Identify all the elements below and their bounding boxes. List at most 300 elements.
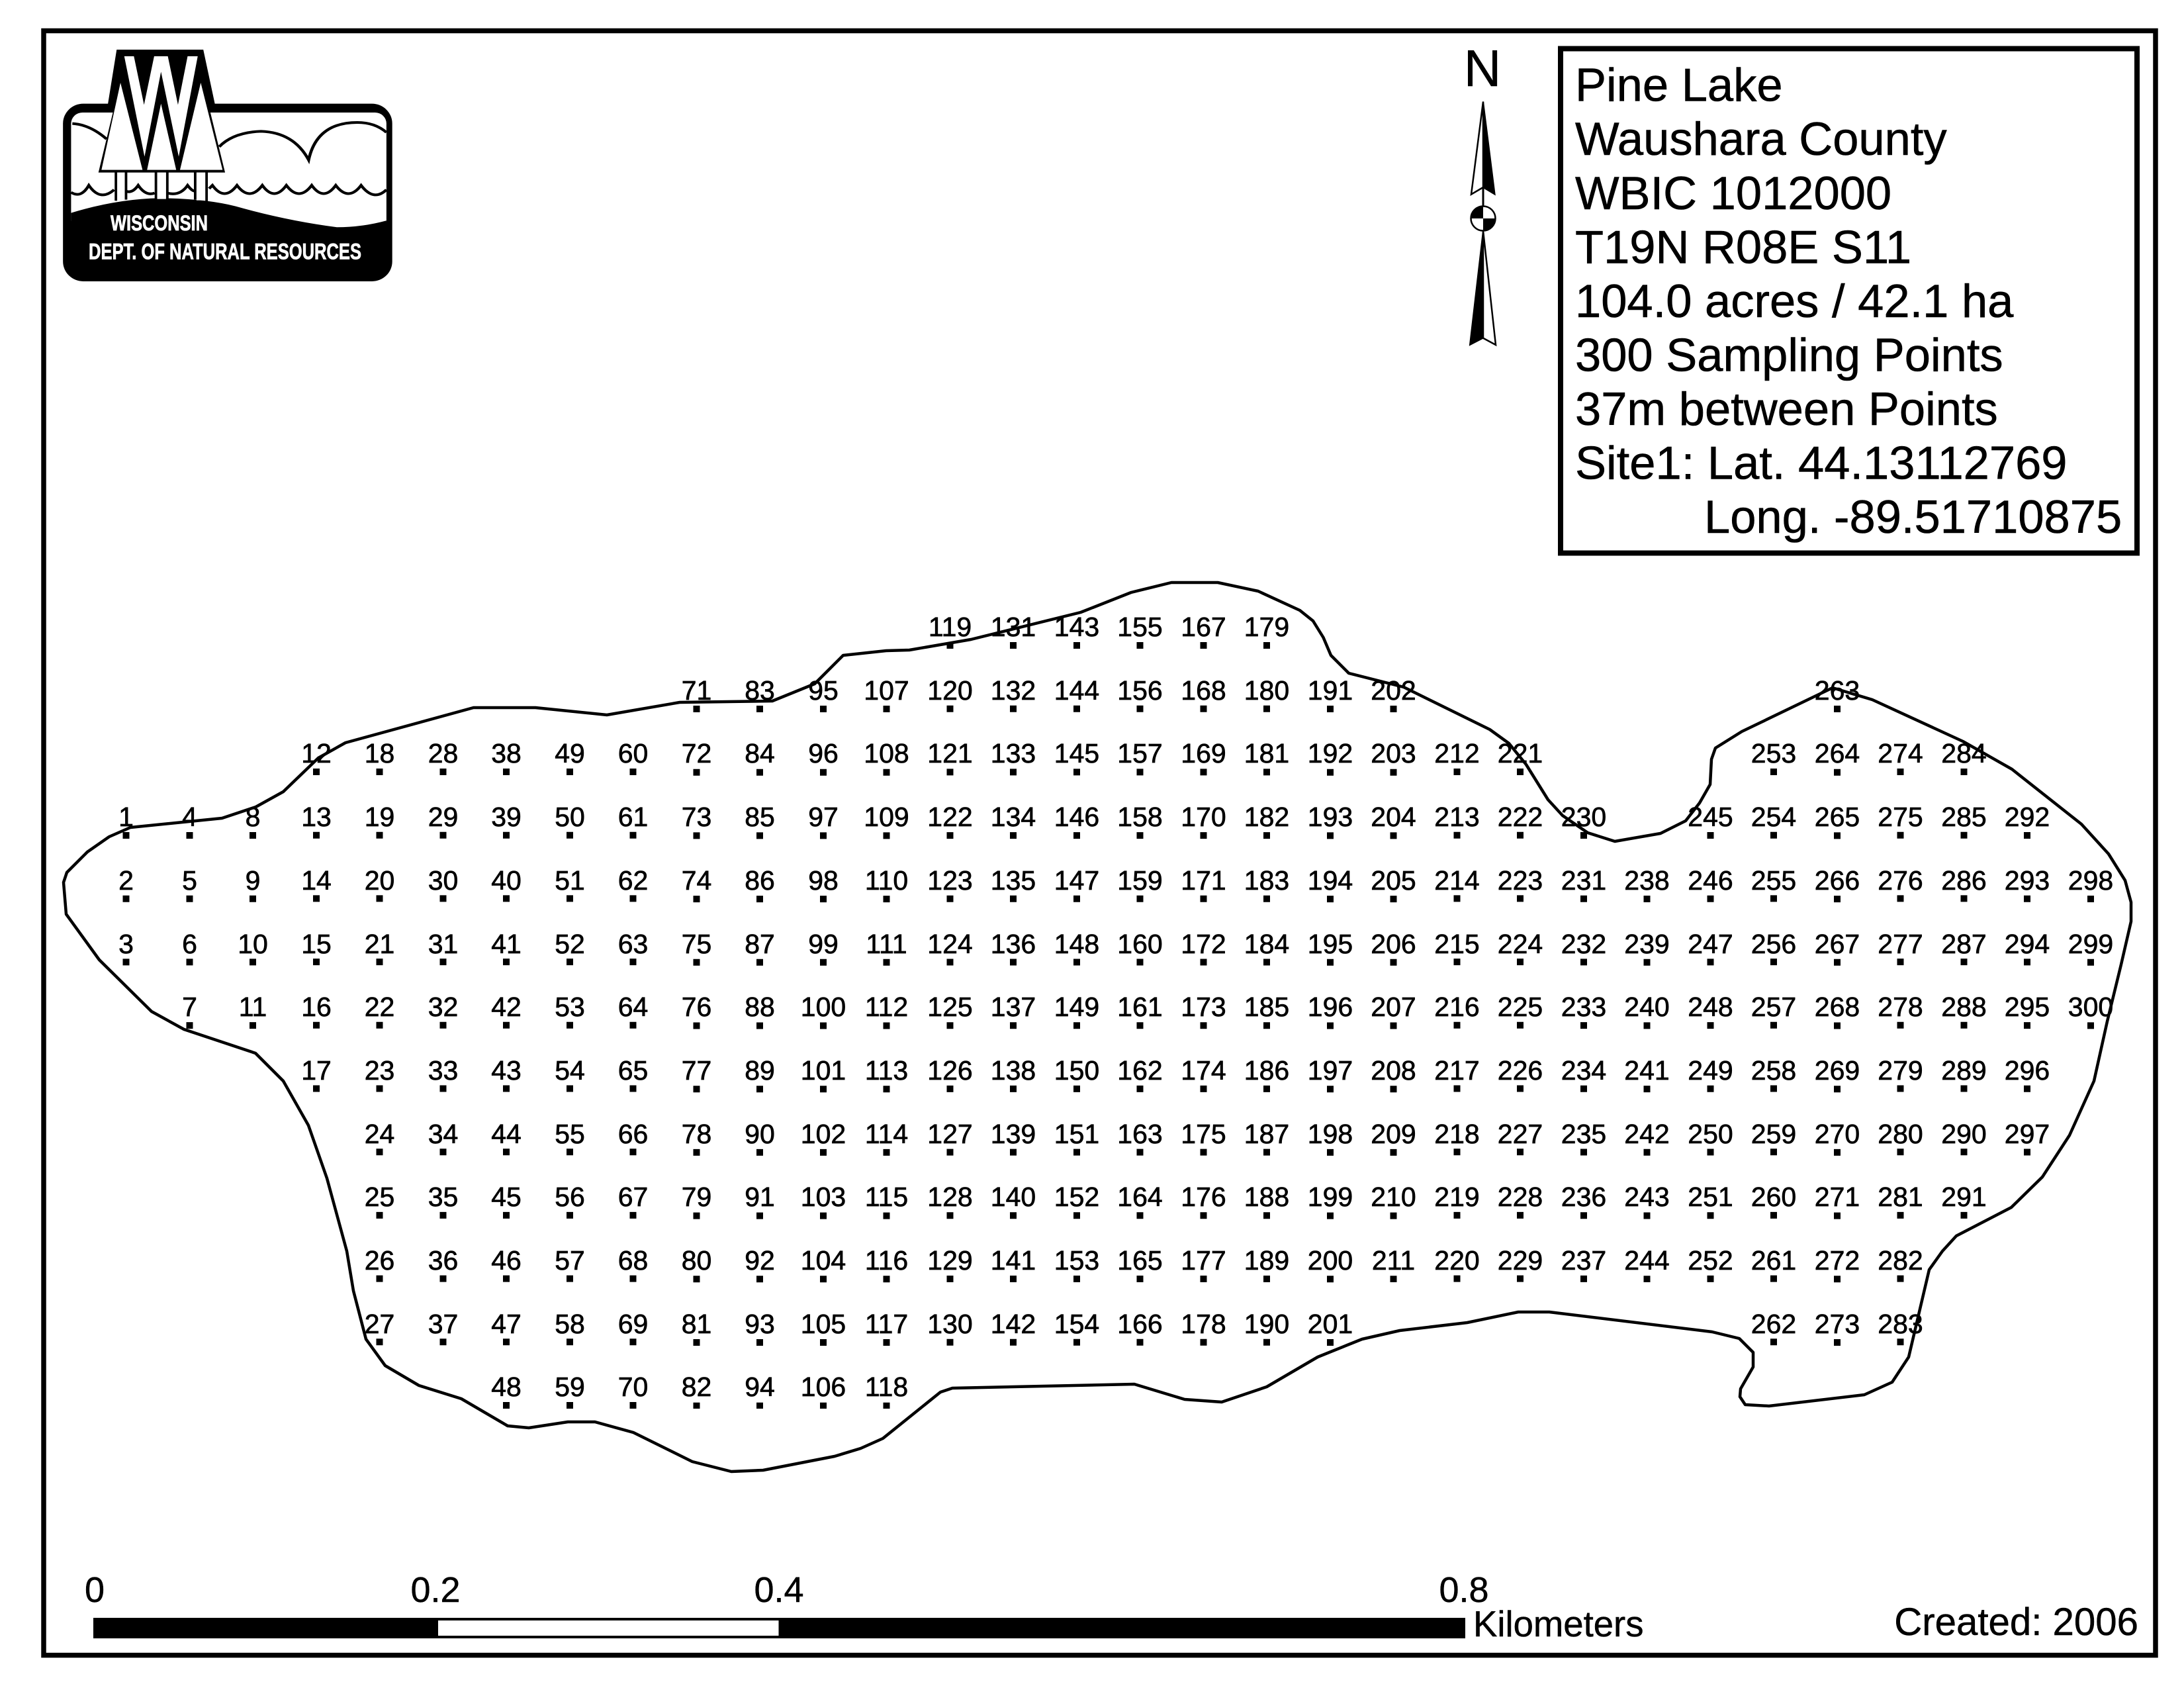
sampling points column 7: 42 — [491, 992, 522, 1022]
sampling points column 18: 170 — [1181, 802, 1226, 832]
sampling points column 12: 103 — [801, 1182, 846, 1212]
sampling points column 7: 38 — [491, 738, 522, 769]
sampling points column 27: 262 — [1751, 1309, 1796, 1339]
sampling points column 14: 128 — [927, 1182, 973, 1212]
sampling points column 22: 219 — [1434, 1182, 1480, 1212]
sampling points column 17: 166 — [1117, 1309, 1163, 1339]
sampling points column 8: 49 — [555, 738, 585, 769]
sampling points column 17: 156 — [1117, 675, 1163, 706]
scale bar: 0.2 — [410, 1570, 461, 1610]
sampling points column 18: 171 — [1181, 865, 1226, 896]
sampling points column 18: 173 — [1181, 992, 1226, 1022]
sampling points column 3: 9 — [246, 865, 260, 896]
sampling points column 1 — [118, 802, 134, 966]
sampling points column 2: 6 — [182, 929, 197, 959]
sampling points column 17: 157 — [1117, 738, 1163, 769]
sampling points column 17: 163 — [1117, 1119, 1163, 1149]
sampling points column 2: 5 — [182, 865, 197, 896]
legend box: Long. -89.51710875 — [1704, 491, 2122, 543]
sampling points column 12: 102 — [801, 1119, 846, 1149]
sampling points column 31: 296 — [2005, 1055, 2050, 1086]
sampling points column 13: 109 — [864, 802, 909, 832]
sampling points column 20: 201 — [1308, 1309, 1353, 1339]
sampling points column 9: 69 — [618, 1309, 648, 1339]
sampling points column 20: 198 — [1308, 1119, 1353, 1149]
sampling points column 3: 8 — [246, 802, 260, 832]
sampling points column 18: 177 — [1181, 1245, 1226, 1276]
sampling points column 21 — [1371, 675, 1416, 1282]
sampling points column 30: 290 — [1941, 1119, 1987, 1149]
sampling points column 28 — [1815, 675, 1860, 1346]
sampling points column 20: 193 — [1308, 802, 1353, 832]
legend box — [1561, 49, 2137, 553]
sampling points column 23: 226 — [1498, 1055, 1543, 1086]
sampling points column 6: 31 — [428, 929, 458, 959]
sampling points column 14: 125 — [927, 992, 973, 1022]
sampling points column 11: 88 — [745, 992, 775, 1022]
sampling points column 24: 231 — [1561, 865, 1606, 896]
sampling points column 5: 20 — [365, 865, 394, 896]
sampling points column 16: 143 — [1054, 612, 1099, 642]
sampling points column 23: 227 — [1498, 1119, 1543, 1149]
sampling points column 11: 87 — [745, 929, 775, 959]
sampling points column 2: 7 — [182, 992, 197, 1022]
sampling points column 23: 224 — [1498, 929, 1543, 959]
sampling points column 6: 34 — [428, 1119, 458, 1149]
sampling points column 32 — [2068, 865, 2113, 1029]
sampling points column 6 — [428, 738, 458, 1346]
legend box: T19N R08E S11 — [1575, 221, 1911, 273]
sampling points column 5: 21 — [365, 929, 394, 959]
sampling points column 22: 213 — [1434, 802, 1480, 832]
sampling points column 5 — [365, 738, 394, 1346]
sampling points column 19 — [1244, 612, 1289, 1346]
sampling points column 12: 98 — [808, 865, 839, 896]
sampling points column 13: 111 — [866, 929, 907, 959]
sampling points column 17: 164 — [1117, 1182, 1163, 1212]
sampling points column 23: 221 — [1498, 738, 1543, 769]
sampling points column 29: 274 — [1878, 738, 1923, 769]
sampling points column 26 — [1688, 802, 1733, 1282]
sampling points column 23: 228 — [1498, 1182, 1543, 1212]
scale bar: 0 — [85, 1570, 105, 1610]
sampling points column 13 — [864, 675, 909, 1409]
sampling points column 27: 260 — [1751, 1182, 1796, 1212]
sampling points column 4: 15 — [301, 929, 332, 959]
sampling points column 23 — [1498, 738, 1543, 1282]
sampling points column 15: 135 — [991, 865, 1036, 896]
sampling points column 18: 172 — [1181, 929, 1226, 959]
sampling points column 4: 14 — [301, 865, 332, 896]
sampling points column 17 — [1117, 612, 1163, 1346]
sampling points column 16: 154 — [1054, 1309, 1099, 1339]
sampling points column 8: 53 — [555, 992, 585, 1022]
sampling points column 20: 196 — [1308, 992, 1353, 1022]
sampling points column 29: 280 — [1878, 1119, 1923, 1149]
logo: Wisconsin DNR: WISCONSIN — [111, 211, 208, 235]
sampling points column 15: 136 — [991, 929, 1036, 959]
sampling points column 6: 37 — [428, 1309, 458, 1339]
sampling points column 30: 286 — [1941, 865, 1987, 896]
sampling points column 14: 124 — [927, 929, 973, 959]
sampling points column 27 — [1751, 738, 1796, 1346]
sampling points column 15: 141 — [991, 1245, 1036, 1276]
sampling points column 17: 165 — [1117, 1245, 1163, 1276]
sampling points column 14: 123 — [927, 865, 973, 896]
sampling points column 1: 3 — [118, 929, 134, 959]
sampling points column 13: 112 — [865, 992, 908, 1022]
sampling points column 10: 74 — [682, 865, 711, 896]
sampling points column 12: 97 — [808, 802, 839, 832]
sampling points column 25: 240 — [1624, 992, 1670, 1022]
sampling points column 30: 289 — [1941, 1055, 1987, 1086]
sampling points column 14: 130 — [927, 1309, 973, 1339]
sampling points column 13: 115 — [865, 1182, 908, 1212]
sampling points column 31: 295 — [2005, 992, 2050, 1022]
sampling points column 21: 203 — [1371, 738, 1416, 769]
sampling points column 7: 47 — [491, 1309, 522, 1339]
sampling points column 22: 214 — [1434, 865, 1480, 896]
logo: Wisconsin DNR: DEPT. OF NATURAL RESOURCES — [89, 240, 361, 265]
sampling points column 13: 117 — [865, 1309, 908, 1339]
sampling points column 9 — [618, 738, 648, 1409]
sampling points column 15: 134 — [991, 802, 1036, 832]
sampling points column 25: 244 — [1624, 1245, 1670, 1276]
sampling points column 12: 105 — [801, 1309, 846, 1339]
sampling points column 16: 151 — [1054, 1119, 1099, 1149]
scale bar — [85, 1570, 1643, 1644]
sampling points column 9: 68 — [618, 1245, 648, 1276]
sampling points column 12: 106 — [801, 1372, 846, 1402]
sampling points column 10: 79 — [682, 1182, 711, 1212]
sampling points column 14: 120 — [927, 675, 973, 706]
sampling points column 24: 233 — [1561, 992, 1606, 1022]
sampling points column 17: 162 — [1117, 1055, 1163, 1086]
sampling points column 17: 160 — [1117, 929, 1163, 959]
sampling points column 19: 188 — [1244, 1182, 1289, 1212]
sampling points column 14 — [927, 612, 973, 1346]
legend box: 300 Sampling Points — [1575, 328, 2003, 381]
sampling points column 26: 249 — [1688, 1055, 1733, 1086]
sampling points column 20: 199 — [1308, 1182, 1353, 1212]
sampling points column 2: 4 — [182, 802, 197, 832]
sampling points column 12: 100 — [801, 992, 846, 1022]
sampling points column 20 — [1308, 675, 1353, 1346]
sampling points column 9: 61 — [618, 802, 648, 832]
sampling points column 7 — [491, 738, 522, 1409]
sampling points column 15: 142 — [991, 1309, 1036, 1339]
sampling points column 6: 29 — [428, 802, 458, 832]
sampling points column 5: 23 — [365, 1055, 394, 1086]
sampling points column 30 — [1941, 738, 1987, 1219]
sampling points column 11: 89 — [745, 1055, 775, 1086]
sampling points column 7: 48 — [491, 1372, 522, 1402]
sampling points column 18: 174 — [1181, 1055, 1226, 1086]
sampling points column 7: 39 — [491, 802, 522, 832]
sampling points column 22: 220 — [1434, 1245, 1480, 1276]
sampling points column 27: 261 — [1751, 1245, 1796, 1276]
sampling points column 13: 113 — [865, 1055, 908, 1086]
sampling points column 3: 11 — [239, 992, 267, 1022]
sampling points column 27: 253 — [1751, 738, 1796, 769]
sampling points column 30: 291 — [1941, 1182, 1987, 1212]
sampling points column 20: 197 — [1308, 1055, 1353, 1086]
sampling points column 6: 36 — [428, 1245, 458, 1276]
sampling points column 31 — [2005, 802, 2050, 1156]
sampling points column 13: 107 — [864, 675, 909, 706]
sampling points column 17: 155 — [1117, 612, 1163, 642]
sampling points column 26: 250 — [1688, 1119, 1733, 1149]
sampling points column 18 — [1181, 612, 1226, 1346]
sampling points column 29: 279 — [1878, 1055, 1923, 1086]
sampling points column 29: 281 — [1878, 1182, 1923, 1212]
sampling points column 14: 122 — [927, 802, 973, 832]
legend box: WBIC 1012000 — [1575, 167, 1891, 219]
sampling points column 9: 70 — [618, 1372, 648, 1402]
sampling points column 14: 119 — [929, 612, 972, 642]
sampling points column 14: 127 — [927, 1119, 973, 1149]
sampling points column 16: 146 — [1054, 802, 1099, 832]
north arrow — [1464, 39, 1501, 345]
sampling points column 28: 273 — [1815, 1309, 1860, 1339]
sampling points column 30: 285 — [1941, 802, 1987, 832]
sampling points column 23: 223 — [1498, 865, 1543, 896]
sampling points column 10: 76 — [682, 992, 711, 1022]
sampling points column 26: 246 — [1688, 865, 1733, 896]
sampling points column 13: 110 — [865, 865, 908, 896]
sampling points column 18: 168 — [1181, 675, 1226, 706]
sampling points column 10: 73 — [682, 802, 711, 832]
sampling points column 16: 144 — [1054, 675, 1099, 706]
scale bar: 0.4 — [754, 1570, 804, 1610]
sampling points column 20: 195 — [1308, 929, 1353, 959]
sampling points column 19: 190 — [1244, 1309, 1289, 1339]
sampling points column 1: 1 — [118, 802, 134, 832]
sampling points column 21: 207 — [1371, 992, 1416, 1022]
sampling points column 20: 200 — [1308, 1245, 1353, 1276]
sampling points column 19: 186 — [1244, 1055, 1289, 1086]
sampling points column 30: 284 — [1941, 738, 1987, 769]
sampling points column 12: 96 — [808, 738, 839, 769]
sampling points column 6: 30 — [428, 865, 458, 896]
sampling points column 21: 205 — [1371, 865, 1416, 896]
sampling points column 12: 104 — [801, 1245, 846, 1276]
sampling points column 11: 94 — [745, 1372, 775, 1402]
legend box: Site1: Lat. 44.13112769 — [1575, 437, 2068, 489]
sampling points column 28: 269 — [1815, 1055, 1860, 1086]
sampling points column 4: 17 — [301, 1055, 332, 1086]
sampling points column 28: 263 — [1815, 675, 1860, 706]
sampling points column 24 — [1561, 802, 1606, 1282]
sampling points column 27: 259 — [1751, 1119, 1796, 1149]
sampling points column 21: 209 — [1371, 1119, 1416, 1149]
scale bar: 0.8 — [1439, 1570, 1489, 1610]
legend box: Pine Lake — [1575, 58, 1783, 111]
sampling points column 25: 243 — [1624, 1182, 1670, 1212]
sampling points column 19: 184 — [1244, 929, 1289, 959]
sampling points column 7: 44 — [491, 1119, 522, 1149]
lake outline — [64, 583, 2131, 1472]
sampling points column 16: 153 — [1054, 1245, 1099, 1276]
sampling points column 8: 54 — [555, 1055, 585, 1086]
sampling points column 15: 133 — [991, 738, 1036, 769]
sampling points column 16: 147 — [1054, 865, 1099, 896]
sampling points column 7: 41 — [491, 929, 522, 959]
sampling points column 1: 2 — [118, 865, 134, 896]
sampling points column 10: 80 — [682, 1245, 711, 1276]
sampling points column 6: 35 — [428, 1182, 458, 1212]
sampling points column 18: 175 — [1181, 1119, 1226, 1149]
sampling points column 29 — [1878, 738, 1923, 1346]
sampling points column 10: 75 — [682, 929, 711, 959]
sampling points column 23: 229 — [1498, 1245, 1543, 1276]
sampling points column 17: 159 — [1117, 865, 1163, 896]
sampling points column 21: 208 — [1371, 1055, 1416, 1086]
sampling points column 21: 210 — [1371, 1182, 1416, 1212]
sampling points column 30: 287 — [1941, 929, 1987, 959]
sampling points column 27: 257 — [1751, 992, 1796, 1022]
sampling points column 13: 114 — [865, 1119, 908, 1149]
sampling points column 9: 62 — [618, 865, 648, 896]
sampling points column 31: 294 — [2005, 929, 2050, 959]
sampling points column 31: 292 — [2005, 802, 2050, 832]
sampling points column 14: 126 — [927, 1055, 973, 1086]
sampling points column 20: 194 — [1308, 865, 1353, 896]
sampling points column 21: 206 — [1371, 929, 1416, 959]
sampling points column 24: 230 — [1561, 802, 1606, 832]
sampling points column 25: 241 — [1624, 1055, 1670, 1086]
sampling points column 2 — [182, 802, 197, 1029]
sampling points column 27: 258 — [1751, 1055, 1796, 1086]
scale bar: Kilometers — [1473, 1604, 1643, 1644]
sampling points column 8: 57 — [555, 1245, 585, 1276]
sampling points column 24: 234 — [1561, 1055, 1606, 1086]
sampling points column 18: 178 — [1181, 1309, 1226, 1339]
sampling points column 10: 81 — [682, 1309, 711, 1339]
sampling points column 13: 118 — [865, 1372, 908, 1402]
sampling points column 10 — [682, 675, 711, 1409]
sampling points column 20: 192 — [1308, 738, 1353, 769]
sampling points column 8: 51 — [555, 865, 585, 896]
sampling points column 16: 152 — [1054, 1182, 1099, 1212]
sampling points column 15 — [991, 612, 1036, 1346]
sampling points column 31: 297 — [2005, 1119, 2050, 1149]
sampling points column 8: 55 — [555, 1119, 585, 1149]
sampling points column 10: 72 — [682, 738, 711, 769]
sampling points column 27: 255 — [1751, 865, 1796, 896]
sampling points column 4: 12 — [301, 738, 332, 769]
sampling points column 25 — [1624, 865, 1670, 1282]
sampling points column 4 — [301, 738, 332, 1093]
sampling points column 19: 181 — [1244, 738, 1289, 769]
sampling points column 28: 270 — [1815, 1119, 1860, 1149]
sampling points column 22: 212 — [1434, 738, 1480, 769]
sampling points column 16: 150 — [1054, 1055, 1099, 1086]
sampling points column 29: 283 — [1878, 1309, 1923, 1339]
sampling points column 11: 86 — [745, 865, 775, 896]
sampling points column 16: 149 — [1054, 992, 1099, 1022]
sampling points column 26: 248 — [1688, 992, 1733, 1022]
sampling points column 9: 63 — [618, 929, 648, 959]
sampling points column 28: 266 — [1815, 865, 1860, 896]
sampling points column 9: 65 — [618, 1055, 648, 1086]
sampling points column 27: 256 — [1751, 929, 1796, 959]
sampling points column 10: 82 — [682, 1372, 711, 1402]
sampling points column 28: 268 — [1815, 992, 1860, 1022]
sampling points column 21: 202 — [1371, 675, 1416, 706]
sampling points column 18: 176 — [1181, 1182, 1226, 1212]
sampling points column 5: 25 — [365, 1182, 394, 1212]
sampling points column 6: 33 — [428, 1055, 458, 1086]
sampling points column 32: 298 — [2068, 865, 2113, 896]
sampling points column 8: 52 — [555, 929, 585, 959]
sampling points column 19: 179 — [1244, 612, 1289, 642]
sampling points column 15: 140 — [991, 1182, 1036, 1212]
sampling points column 15: 137 — [991, 992, 1036, 1022]
sampling points column 14: 129 — [927, 1245, 973, 1276]
sampling points column 19: 183 — [1244, 865, 1289, 896]
sampling points column 22: 215 — [1434, 929, 1480, 959]
sampling points column 8 — [555, 738, 585, 1409]
sampling points column 7: 43 — [491, 1055, 522, 1086]
sampling points column 10: 78 — [682, 1119, 711, 1149]
sampling points column 16: 145 — [1054, 738, 1099, 769]
sampling points column 11 — [745, 675, 775, 1409]
sampling points column 12: 101 — [801, 1055, 846, 1086]
sampling points column 5: 18 — [365, 738, 394, 769]
sampling points column 28: 267 — [1815, 929, 1860, 959]
sampling points column 29: 282 — [1878, 1245, 1923, 1276]
sampling points column 26: 252 — [1688, 1245, 1733, 1276]
sampling points column 4: 13 — [301, 802, 332, 832]
sampling points column 26: 245 — [1688, 802, 1733, 832]
sampling points column 11: 85 — [745, 802, 775, 832]
created date: Created: 2006 — [1894, 1601, 2138, 1644]
sampling points column 11: 91 — [745, 1182, 775, 1212]
sampling points column 3 — [238, 802, 268, 1029]
sampling points column 21: 211 — [1372, 1245, 1415, 1276]
sampling points column 29: 277 — [1878, 929, 1923, 959]
sampling points column 19: 182 — [1244, 802, 1289, 832]
sampling points column 26: 247 — [1688, 929, 1733, 959]
sampling points column 9: 66 — [618, 1119, 648, 1149]
sampling points column 19: 180 — [1244, 675, 1289, 706]
sampling points column 15: 138 — [991, 1055, 1036, 1086]
sampling points column 19: 185 — [1244, 992, 1289, 1022]
sampling points column 4: 16 — [301, 992, 332, 1022]
sampling points column 15: 131 — [991, 612, 1036, 642]
sampling points column 5: 27 — [365, 1309, 394, 1339]
sampling points column 29: 276 — [1878, 865, 1923, 896]
sampling points column 27: 254 — [1751, 802, 1796, 832]
legend box: Waushara County — [1575, 113, 1947, 165]
sampling points column 8: 50 — [555, 802, 585, 832]
sampling points column 32: 299 — [2068, 929, 2113, 959]
sampling points column 12 — [801, 675, 846, 1409]
sampling points column 24: 237 — [1561, 1245, 1606, 1276]
sampling points column 5: 22 — [365, 992, 394, 1022]
sampling points column 28: 271 — [1815, 1182, 1860, 1212]
sampling points column 8: 56 — [555, 1182, 585, 1212]
sampling points column 10: 77 — [682, 1055, 711, 1086]
sampling points column 12: 95 — [808, 675, 839, 706]
sampling points column 11: 92 — [745, 1245, 775, 1276]
sampling points column 12: 99 — [808, 929, 839, 959]
sampling points column 22: 217 — [1434, 1055, 1480, 1086]
sampling points column 25: 239 — [1624, 929, 1670, 959]
sampling points column 11: 93 — [745, 1309, 775, 1339]
sampling points column 9: 64 — [618, 992, 648, 1022]
